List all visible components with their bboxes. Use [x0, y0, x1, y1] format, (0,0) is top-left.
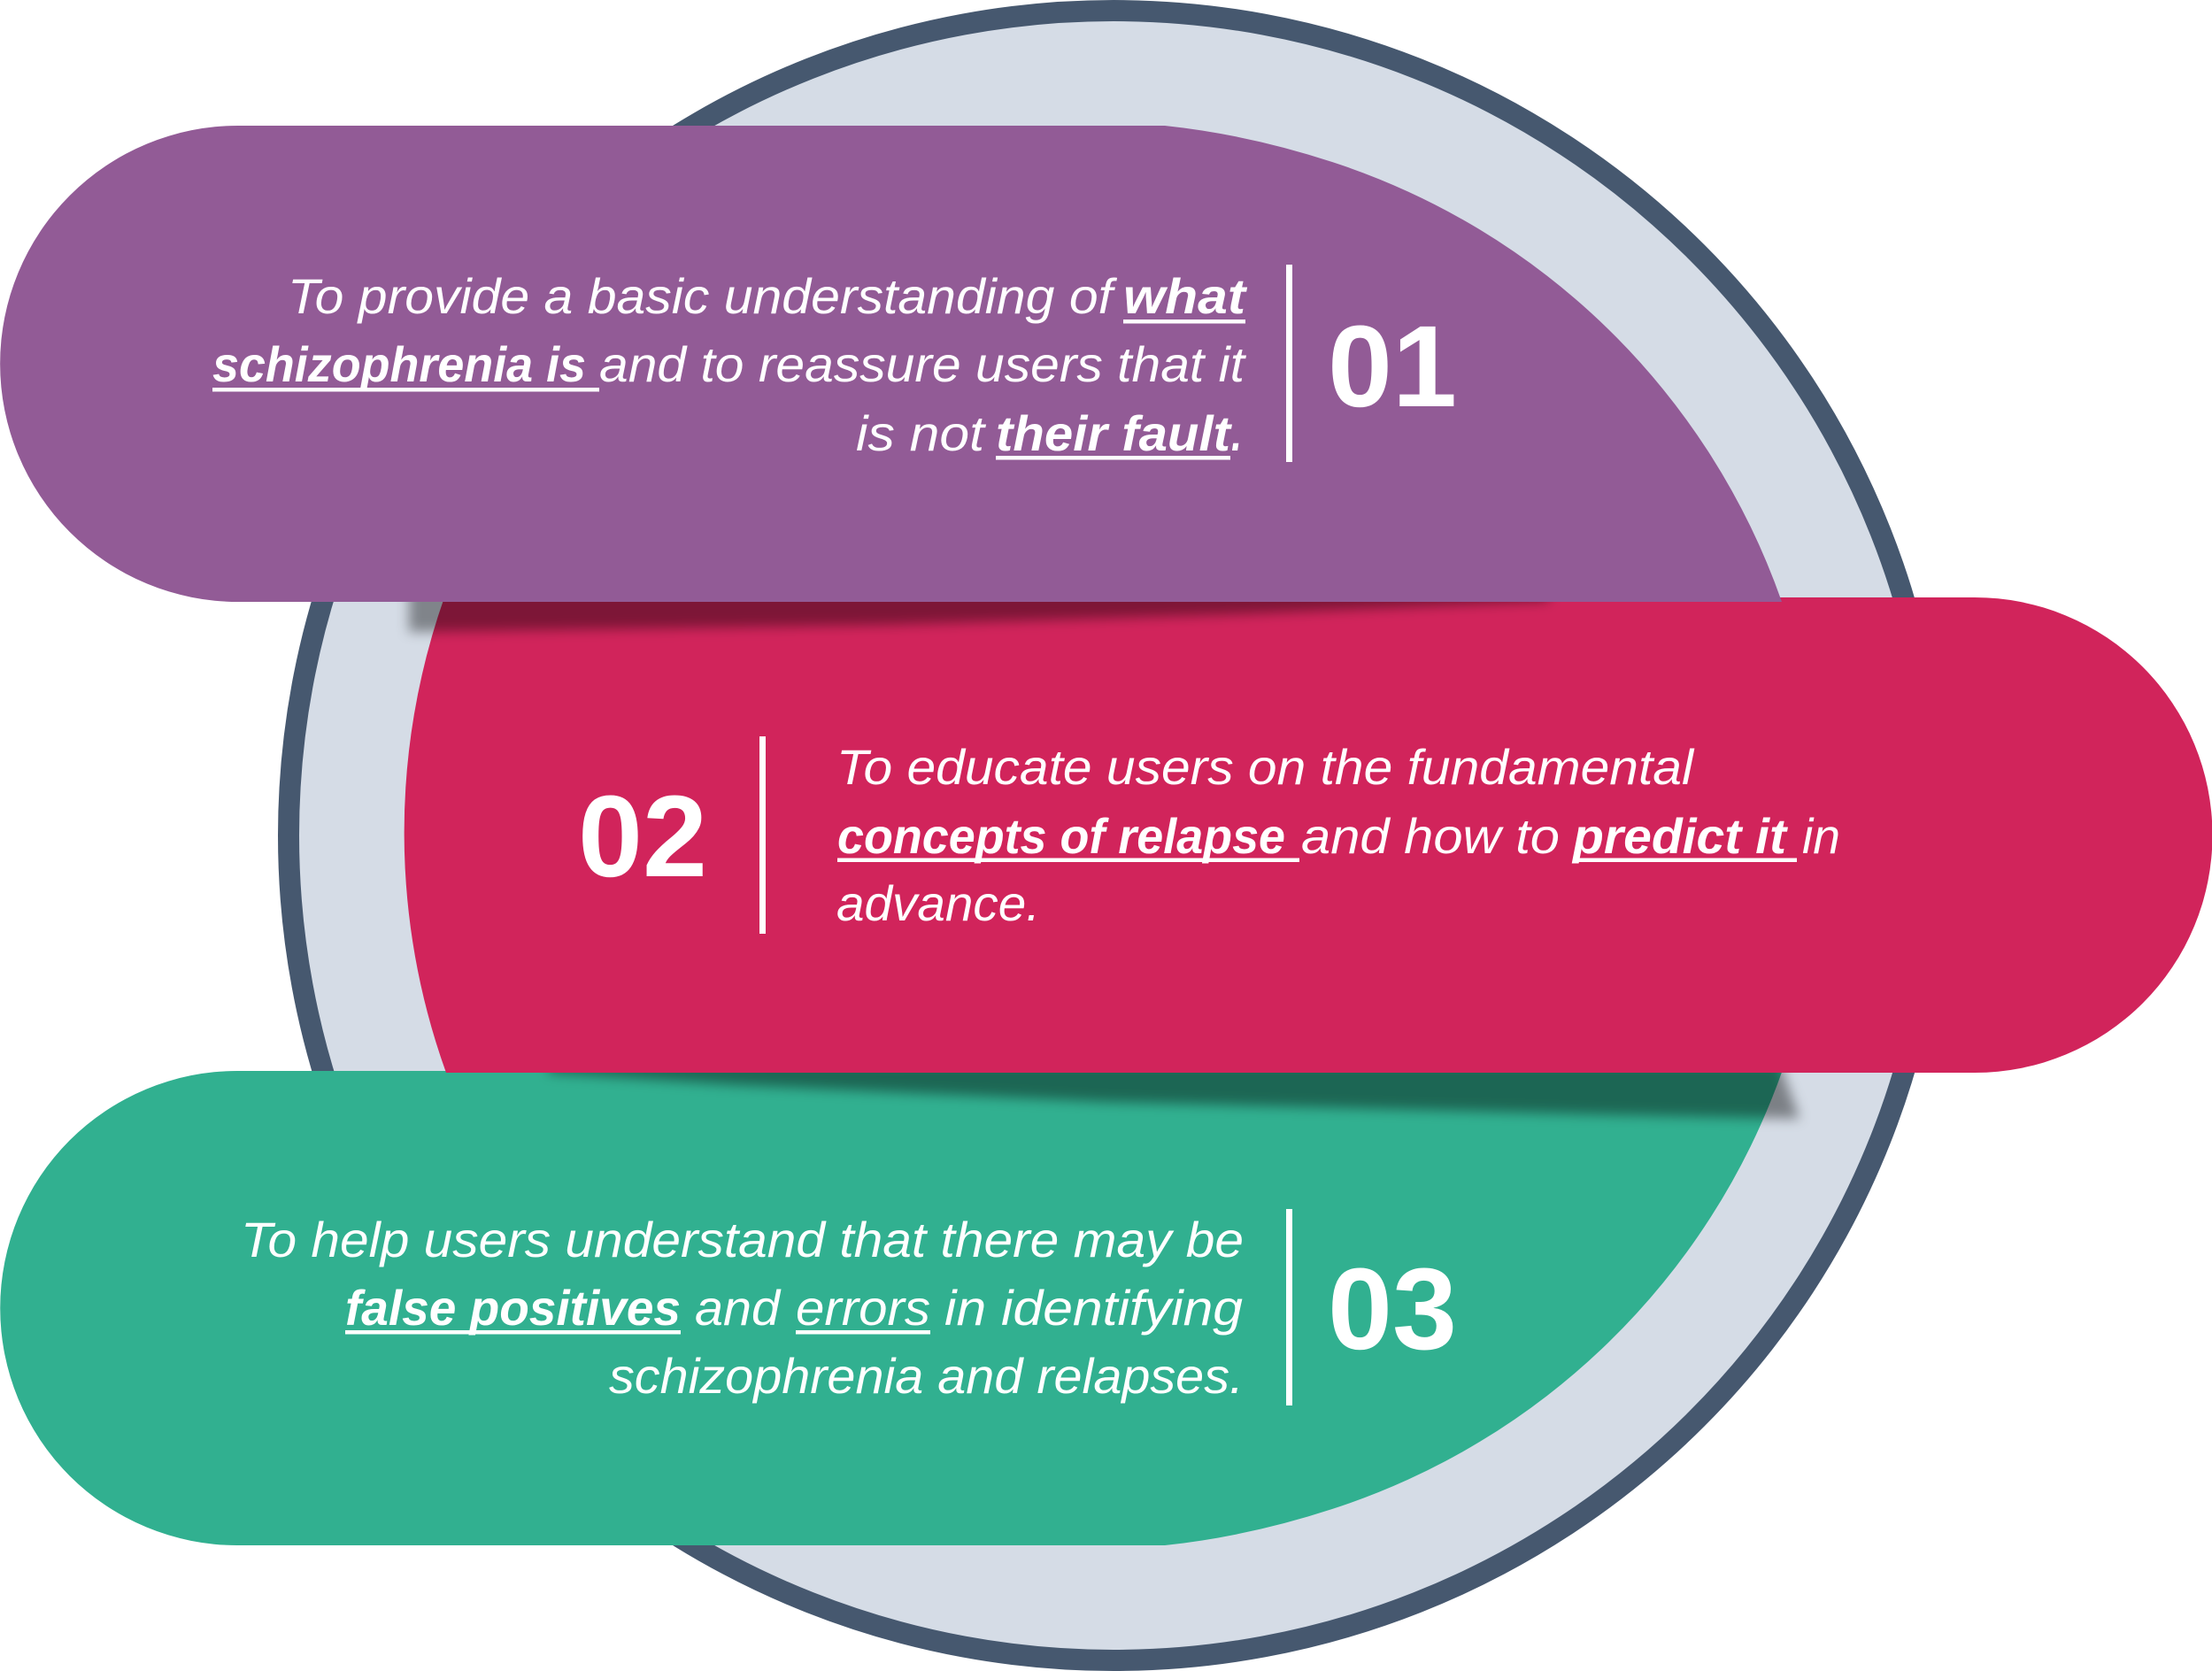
- panel: 03 false positives: [0, 1071, 1783, 1545]
- panel: 01 what schizophrenia is: [0, 126, 1782, 602]
- statement text 01: and to reassure users that it: [599, 336, 1247, 392]
- statement text 02: To educate users on the fundamental: [836, 739, 1695, 795]
- statement text 01: what: [1123, 268, 1248, 324]
- statement text 01: [212, 268, 1248, 461]
- statement text 03: schizophrenia and relapses.: [609, 1348, 1244, 1404]
- statement text 01: .: [1231, 405, 1242, 461]
- statement text 01: To provide a basic understanding of: [288, 268, 1118, 324]
- statement text 02: predict it: [1571, 808, 1788, 864]
- number 02: 02: [578, 771, 707, 901]
- green banner shape: [0, 1071, 1783, 1545]
- statement text 02: and how to: [1301, 808, 1560, 864]
- background circle: [289, 11, 1938, 1660]
- purple banner shape: [0, 126, 1782, 602]
- number 01: 01: [1328, 301, 1457, 431]
- statement text 02: advance.: [836, 875, 1040, 931]
- statement text 03: in identifying: [944, 1280, 1243, 1336]
- statement text 03: and: [695, 1280, 782, 1336]
- statement text 03: false positives: [345, 1280, 681, 1336]
- shadow cast on crimson banner: [409, 584, 1549, 632]
- statement text 01: schizophrenia is: [212, 336, 586, 392]
- statement text 02: [836, 739, 1840, 931]
- divider 01: [1286, 265, 1292, 462]
- statement text 02: in: [1802, 808, 1840, 864]
- number 03: 03: [1328, 1244, 1457, 1374]
- statement text 03: [241, 1212, 1244, 1404]
- panel: 02 relapse: [405, 597, 2212, 1073]
- divider 03: [1286, 1209, 1292, 1405]
- statement text 03: To help users understand that there may be: [241, 1212, 1244, 1267]
- shadow cast on green banner: [549, 1062, 1800, 1119]
- statement text 01: is not: [856, 405, 987, 461]
- statement text 03: errors: [796, 1280, 930, 1336]
- crimson banner shape: [405, 597, 2212, 1073]
- statement text 01: their fault: [996, 405, 1232, 461]
- statement text 02: concepts of relapse: [837, 808, 1285, 864]
- divider 02: [759, 736, 766, 934]
